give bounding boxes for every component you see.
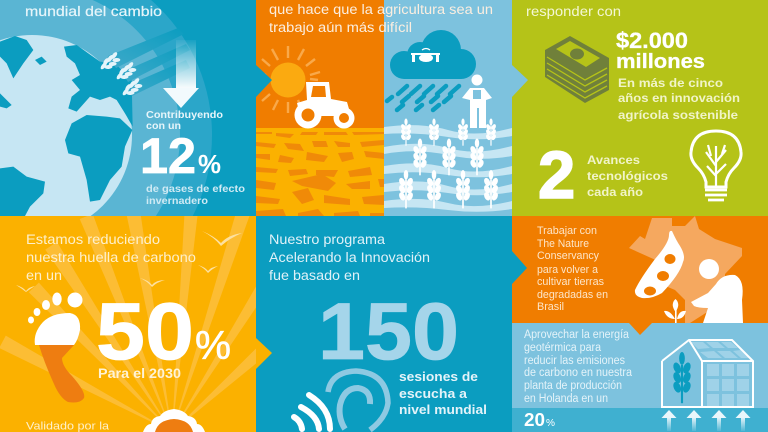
- text: anos: años en innovación: [618, 91, 740, 105]
- text: line three: fue basado en: [269, 268, 360, 283]
- text: cada ano: cada año: [587, 187, 643, 199]
- text: avances: Avances: [587, 155, 640, 167]
- text: nature conservancy block: para volver a: [537, 264, 599, 276]
- stat: 150: 150: [318, 287, 459, 377]
- arrow: emissions downward: [163, 40, 199, 108]
- text: nature conservancy block: [537, 225, 608, 313]
- panel: global climate contribution: [0, 0, 256, 216]
- icon: sound waves: [294, 395, 330, 429]
- percent sign: %: [195, 324, 231, 368]
- map: Brazil: [629, 216, 742, 323]
- text: geothermal block: [524, 329, 633, 405]
- icon: footprint: [28, 292, 84, 402]
- text: geothermal block: reducir las emisiones: [524, 355, 625, 367]
- rain: [387, 86, 459, 110]
- wheat spikes on globe: [100, 52, 142, 96]
- globe continents: [0, 36, 133, 216]
- text: en mas de cinco: En más de cinco: [618, 76, 723, 90]
- icon: kneeling person: [691, 259, 743, 323]
- stat: 2.000: $2.000: [616, 28, 688, 53]
- right half: irrigated farming: [384, 0, 512, 216]
- cloud: [390, 30, 476, 79]
- icon: sun: [257, 46, 320, 113]
- text: line two: Acelerando la Innovación: [269, 250, 430, 265]
- lower blue area: [512, 323, 768, 432]
- bottom band: [512, 408, 768, 432]
- text: geothermal block: Aprovechar la energía: [524, 329, 630, 341]
- text: sesiones: sesiones de: [399, 370, 478, 384]
- stat: 20 percent: 20: [524, 410, 545, 430]
- text: line two: trabajo aún más difícil: [269, 20, 412, 35]
- text: agricola: agrícola sostenible: [618, 108, 738, 122]
- icon: sprout: [664, 299, 686, 323]
- globe ocean: [0, 35, 132, 235]
- arrow notch: [256, 338, 272, 369]
- birds: [16, 231, 242, 292]
- icon: farmer: [462, 74, 492, 128]
- panel: carbon footprint: [0, 216, 256, 432]
- text: nature conservancy block: cultivar tierras: [537, 276, 604, 288]
- stat: 2: 2: [538, 138, 575, 213]
- stat: 12 percent: 12: [140, 128, 196, 184]
- text: para el 2030: Para el 2030: [98, 366, 181, 381]
- text: geothermal block: en Holanda en un: [524, 393, 608, 405]
- icon: greenhouse: [662, 340, 753, 407]
- text: tecnologicos: tecnológicos: [587, 171, 668, 183]
- stat: 20 percent: [524, 410, 555, 430]
- stat: 20 percent: %: [546, 418, 555, 429]
- text: nature conservancy block: Trabajar con: [537, 225, 597, 237]
- text: nature conservancy block: Brasil: [537, 301, 564, 313]
- text: geothermal block: planta de producción: [524, 380, 622, 392]
- waves: [384, 125, 512, 212]
- icon: drone: [411, 48, 440, 62]
- stat: 50: 50: [96, 287, 194, 377]
- down notch: [629, 323, 652, 335]
- icon: soy pod: [635, 231, 684, 298]
- text: con un: con un: [146, 120, 181, 132]
- stat: millones: millones: [616, 50, 705, 73]
- inner halo circle: [0, 0, 180, 216]
- outer halo circle: [93, 0, 212, 216]
- wheat rows: [398, 118, 499, 208]
- arrow notch: [256, 65, 272, 97]
- text: escucha: escucha a: [399, 387, 468, 401]
- arrow notch: [512, 65, 528, 97]
- heading text: responder con: [526, 4, 621, 19]
- text: nature conservancy block: Conservancy: [537, 250, 599, 262]
- percent sign: %: [198, 149, 221, 179]
- icon: sun badge: [143, 409, 205, 432]
- ground: [256, 128, 384, 216]
- icon: ear: [328, 371, 388, 430]
- text: line two: nuestra huella de carbono: [26, 250, 196, 265]
- panel: investment: [512, 0, 768, 216]
- text: geothermal block: de carbono en nuestra: [524, 367, 633, 379]
- icon: money stack: [545, 36, 609, 103]
- text: nivel mundial: nivel mundial: [399, 403, 487, 417]
- text: line three: en un: [26, 268, 62, 283]
- wheat in greenhouse: [672, 352, 692, 403]
- icon: light bulb: [691, 131, 741, 200]
- text: line one: Estamos reduciendo: [26, 232, 160, 247]
- text: nature conservancy block: degradadas en: [537, 289, 608, 301]
- text: geothermal block: geotérmica para: [524, 342, 602, 354]
- heat arrows: [662, 410, 750, 431]
- text: invernadero: invernadero: [146, 195, 208, 207]
- icon: tractor: [294, 82, 354, 128]
- heading: mundial del cambio: mundial del cambio: [25, 3, 162, 19]
- text: line one: que hace que la agricultura sea un: [269, 2, 493, 17]
- text: gases: de gases de efecto: [146, 183, 245, 195]
- text: contribuyendo: Contribuyendo: [146, 109, 223, 121]
- panel: dry farming: [256, 0, 512, 216]
- text: nature conservancy block: The Nature: [537, 238, 589, 250]
- text: line one: Nuestro programa: [269, 232, 386, 247]
- arrow notch: [512, 251, 527, 284]
- sun rays: [0, 216, 256, 422]
- cracked earth: [256, 132, 384, 216]
- wheat beams: [108, 28, 190, 96]
- panel: brazil and holland projects: [512, 216, 768, 432]
- panel: listening sessions: [256, 216, 512, 432]
